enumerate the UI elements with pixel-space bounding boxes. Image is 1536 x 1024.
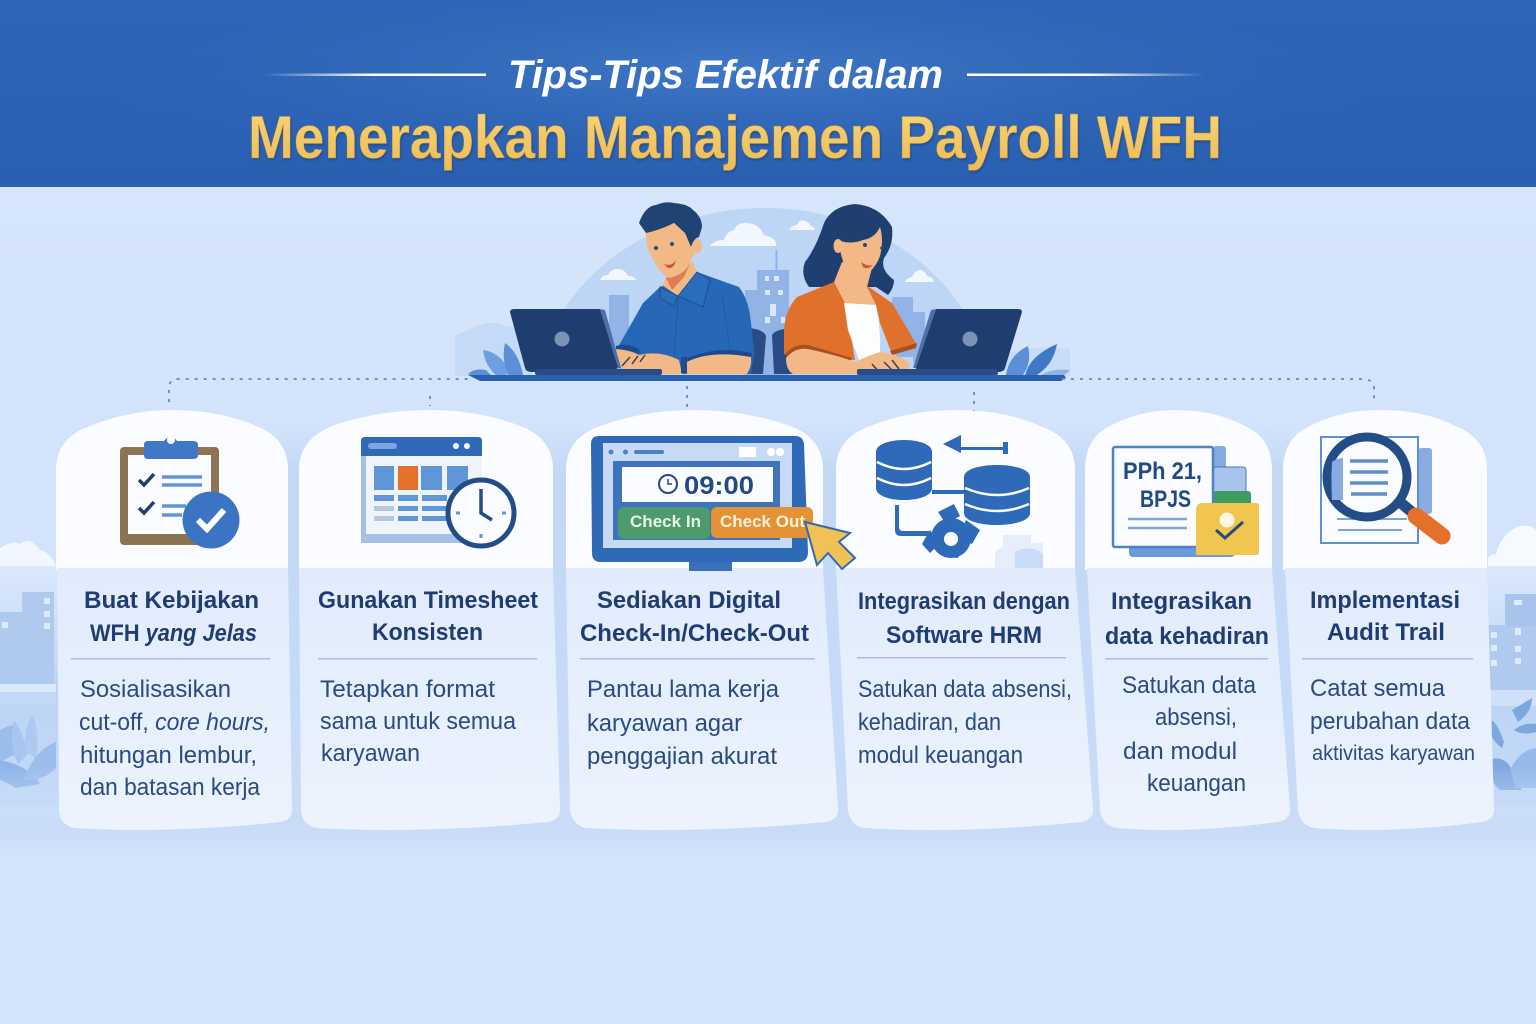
heading bbox=[84, 587, 259, 647]
check out button: Check Out bbox=[720, 512, 805, 531]
heading: data kehadiran bbox=[1105, 623, 1269, 650]
heading bbox=[318, 587, 538, 646]
title divider lines bbox=[262, 74, 1205, 76]
man in blue shirt bbox=[616, 202, 754, 374]
icon: databases and gear bbox=[876, 435, 1043, 568]
card 5: PPh 21 BPJS bbox=[1085, 410, 1290, 830]
body text: sama untuk semua bbox=[320, 708, 517, 735]
desk bbox=[468, 375, 1066, 381]
background skyline and foliage bbox=[0, 526, 1536, 830]
body text bbox=[1310, 675, 1475, 765]
chairs bbox=[745, 328, 794, 374]
hero illustration: two people working on laptops bbox=[455, 202, 1070, 381]
laptop right bbox=[857, 309, 1022, 375]
heading bbox=[858, 588, 1070, 649]
label: PPh 21, BPJS: BPJS bbox=[1140, 486, 1191, 513]
heading: Gunakan Timesheet bbox=[318, 587, 538, 614]
body text: dan batasan kerja bbox=[80, 774, 261, 801]
soft shadow under cards bbox=[0, 830, 1536, 856]
body text: penggajian akurat bbox=[587, 743, 777, 770]
heading: Buat Kebijakan bbox=[84, 587, 259, 614]
body text bbox=[587, 676, 780, 770]
body text: Tetapkan format bbox=[320, 676, 495, 703]
body text bbox=[320, 676, 517, 767]
card 2: timesheet bbox=[299, 410, 560, 830]
gaps behind cards bbox=[270, 425, 1300, 830]
woman in orange cardigan bbox=[784, 204, 917, 374]
icon: magnifier on document bbox=[1321, 437, 1442, 543]
body text: keuangan bbox=[1147, 770, 1246, 797]
laptop left bbox=[510, 309, 662, 375]
time 09:00: 09:00 bbox=[684, 472, 754, 500]
plants bbox=[468, 343, 1070, 376]
card 4: software HRM bbox=[836, 410, 1093, 830]
heading: Sediakan Digital bbox=[597, 587, 781, 614]
body text bbox=[858, 676, 1072, 769]
body text: Catat semua bbox=[1310, 675, 1446, 702]
heading: Audit Trail bbox=[1327, 619, 1445, 646]
heading: WFH yang Jelas bbox=[90, 620, 257, 647]
body text: perubahan data bbox=[1310, 708, 1471, 735]
card 6: audit trail bbox=[1283, 410, 1494, 830]
dotted connector lines bbox=[169, 379, 1374, 424]
check in button: Check In bbox=[630, 512, 701, 531]
cursor pointer over check out button bbox=[805, 522, 855, 569]
icon: clipboard with check bbox=[120, 436, 240, 548]
icon: tax documents and folder bbox=[1113, 446, 1259, 557]
body text bbox=[79, 676, 270, 801]
body text: karyawan bbox=[321, 740, 420, 767]
body text: kehadiran, dan bbox=[858, 709, 1001, 736]
heading: Check-In/Check-Out bbox=[580, 620, 809, 647]
label: PPh 21, BPJS: PPh 21, bbox=[1123, 458, 1202, 485]
check out button bbox=[711, 507, 813, 538]
body text: karyawan agar bbox=[587, 710, 742, 737]
card 3: check-in bbox=[566, 410, 838, 830]
city dome bbox=[455, 208, 1070, 376]
body text: hitungan lembur, bbox=[80, 742, 257, 769]
heading: Implementasi bbox=[1310, 587, 1460, 614]
heading: Integrasikan dengan bbox=[858, 588, 1070, 615]
icon: timesheet with clock bbox=[361, 437, 514, 546]
check in button bbox=[618, 507, 710, 539]
gear bbox=[922, 504, 980, 558]
body text: dan modul bbox=[1123, 738, 1237, 765]
heading: Software HRM bbox=[886, 622, 1042, 649]
body text: Pantau lama kerja bbox=[587, 676, 780, 703]
title line 2: Menerapkan Manajemen Payroll WFH bbox=[248, 104, 1222, 171]
card 1: kebijakan WFH bbox=[56, 410, 292, 830]
heading bbox=[580, 587, 809, 647]
body text: Satukan data bbox=[1122, 672, 1257, 699]
body text: Satukan data absensi, bbox=[858, 676, 1072, 703]
label: PPh 21, BPJS bbox=[1123, 458, 1202, 513]
icon: monitor bbox=[591, 436, 813, 571]
body text: aktivitas karyawan bbox=[1312, 742, 1475, 765]
body text: absensi, bbox=[1155, 704, 1237, 731]
body text bbox=[1122, 672, 1257, 797]
heading: Integrasikan bbox=[1111, 588, 1252, 615]
heading bbox=[1310, 587, 1460, 646]
title line 1: Tips-Tips Efektif dalam bbox=[508, 53, 943, 97]
body text: modul keuangan bbox=[858, 742, 1023, 769]
heading bbox=[1105, 588, 1269, 650]
heading: Konsisten bbox=[372, 619, 483, 646]
header banner bbox=[0, 0, 1536, 187]
body text: Sosialisasikan bbox=[80, 676, 231, 703]
body text: cut-off, core hours, bbox=[79, 709, 270, 736]
